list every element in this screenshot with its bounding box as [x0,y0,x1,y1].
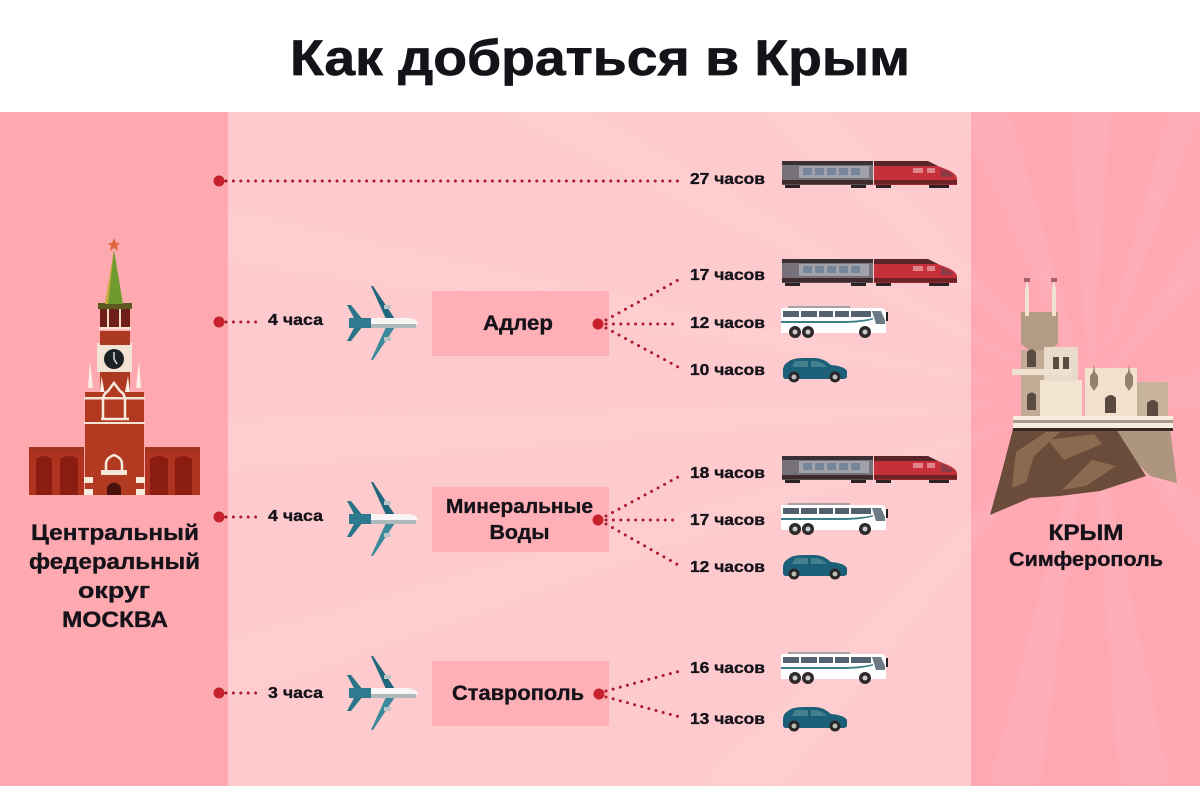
routes from Mineralnye Vody: 12 часов [690,559,765,576]
box: Mineralnye Vody [432,487,609,552]
routes from Stavropol: 16 часов [690,660,765,677]
title: Как добраться в Крым [290,30,910,86]
route: direct train 27 hours: 27 часов [690,171,765,188]
box: Stavropol: Ставрополь [452,682,584,705]
box: Stavropol [432,661,609,726]
heading: Crimea: Симферополь [1009,549,1163,571]
route: direct train 27 hours [214,161,957,188]
panel: Moscow [0,112,228,786]
heading: Moscow: Центральный [31,520,199,545]
icon: Spasskaya tower [29,238,200,495]
route: flight to Adler [214,286,418,360]
routes from Adler [592,259,957,382]
heading: Moscow [29,520,200,632]
heading: Crimea [1009,520,1163,571]
heading: Moscow: округ [78,578,150,603]
routes from Mineralnye Vody: 17 часов [690,512,765,529]
route: flight to Stavropol: 3 часа [268,685,323,702]
panel: Crimea [971,112,1200,786]
routes from Stavropol [594,652,888,732]
route: flight to Adler: 4 часа [268,312,323,329]
box: Adler [432,291,609,356]
box: Mineralnye Vody: Воды [490,522,550,544]
routes from Adler: 17 часов [690,267,765,284]
route: flight to Mineralnye Vody [214,482,418,556]
routes from Stavropol: 13 часов [690,711,765,728]
heading: Crimea: КРЫМ [1048,520,1124,545]
routes from Mineralnye Vody [592,456,957,580]
icon: Swallow's Nest castle [990,278,1177,515]
routes from Adler: 12 часов [690,315,765,332]
heading: Moscow: федеральный [29,549,200,574]
routes from Adler: 10 часов [690,362,765,379]
heading: Moscow: МОСКВА [62,607,168,632]
box: Adler: Адлер [483,312,553,335]
route: flight to Mineralnye Vody: 4 часа [268,508,323,525]
box: Mineralnye Vody: Минеральные [446,496,593,518]
route: flight to Stavropol [214,656,418,730]
routes from Mineralnye Vody: 18 часов [690,465,765,482]
panel: routes background [228,112,971,786]
